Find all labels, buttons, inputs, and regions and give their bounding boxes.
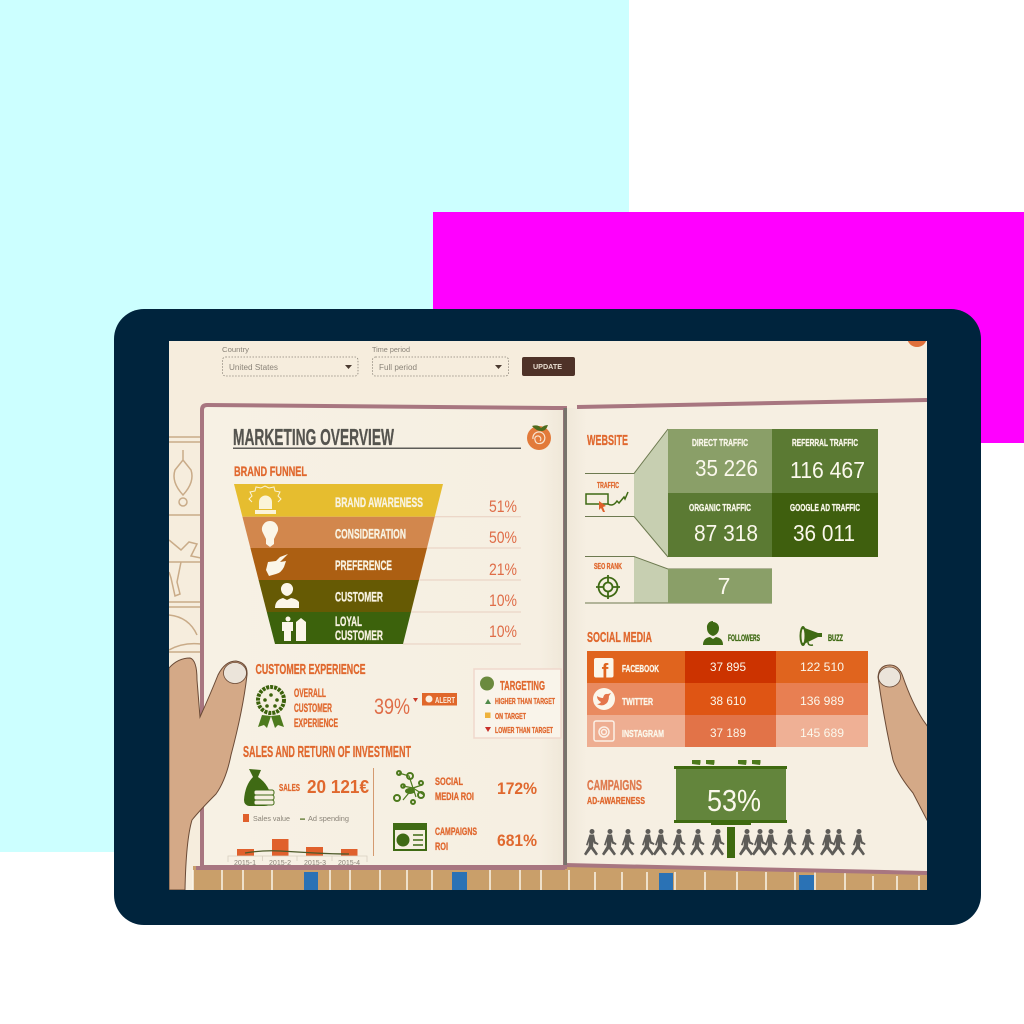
tile: organic traffic [668,493,772,557]
row: instagram [587,715,868,747]
brand funnel [234,463,521,644]
tablet screen [169,327,928,890]
heading: website: WEBSITE [587,432,628,449]
divider [373,768,374,856]
row: instagram: 145 689 [800,728,844,740]
chart legend [243,814,349,823]
row: facebook: f [602,661,609,683]
tile: referral traffic: REFERRAL TRAFFIC [792,437,858,449]
funnel percentages: 21% [489,560,517,579]
sales and return of investment [228,744,537,867]
tile: organic traffic: 87 318 [694,520,758,546]
tile: organic traffic: ORGANIC TRAFFIC [689,502,751,514]
marketing overview title: MARKETING OVERVIEW [233,424,394,450]
right hand holding book [878,665,928,822]
row: instagram: 37 189 [710,728,746,740]
funnel band: preference [250,548,427,580]
update button [522,357,575,376]
label: overall customer experience: CUSTOMER [294,703,332,715]
row: facebook: 122 510 [800,662,844,674]
tile: direct traffic: 35 226 [695,455,758,481]
row: twitter: TWITTER [622,696,653,708]
strip of book page edges [193,866,927,890]
icon: award rosette [258,687,284,728]
bar chart: sales value and ad spending: 2015-4 [338,860,360,867]
seo rank label: SEO RANK [594,562,622,571]
country filter: Country [222,347,250,354]
label: buzz: BUZZ [828,633,843,643]
alert badge: ALERT [435,696,455,705]
metric: sales: 20 121€ [307,777,369,797]
icon: seo target [596,575,620,599]
tile: seo rank value [668,569,772,603]
heading: brand funnel: BRAND FUNNEL [234,463,307,479]
row: twitter [587,683,868,715]
funnel band: loyal customer: CUSTOMER [335,627,383,643]
icon: campaign browser window [394,824,426,850]
label: followers: FOLLOWERS [728,633,760,643]
metric: campaigns roi: ROI [435,841,448,853]
time period filter: Full period [379,363,417,372]
funnel percentages: 50% [489,528,517,547]
left book page [202,405,565,867]
tile: referral traffic [772,429,878,493]
bar chart: sales value and ad spending: 2015-1 [234,860,256,867]
icon: social network [394,771,424,804]
row: facebook: 37 895 [710,662,746,674]
website section [585,429,878,603]
funnel band: customer: CUSTOMER [335,588,383,604]
chart legend: Sales value [253,816,290,823]
funnel band: loyal customer: LOYAL [335,613,362,629]
legend item: lower than target: LOWER THAN TARGET [495,725,553,735]
crowd of walking people [584,829,866,856]
doodle wallpaper [169,437,201,652]
billboard post [727,827,735,858]
funnel percentages: 10% [489,591,517,610]
seo rank connector [585,556,772,603]
metric: social media roi: SOCIAL [435,776,463,788]
metric: campaigns roi: CAMPAIGNS [435,826,477,838]
tile: direct traffic [668,429,772,493]
heading: campaigns ad-awareness: AD-AWARENESS [587,796,645,807]
funnel band: brand awareness [234,484,443,517]
row: facebook: FACEBOOK [622,663,659,675]
tile: seo rank value: 7 [718,573,730,599]
filter bar [222,347,575,376]
icon: traffic trend [586,492,628,512]
chart legend: Ad spending [308,816,349,823]
icon: buzz megaphone [800,626,822,646]
billboard 53 percent [674,760,787,825]
icon: money bag [244,769,274,806]
left hand holding book [169,658,247,890]
metric: sales [279,780,369,793]
book spine [564,408,567,865]
heading: sales and return of investment: SALES AND RETURN OF INVESTMENT [243,744,411,761]
funnel band: brand awareness: BRAND AWARENESS [335,494,423,510]
bar chart: sales value and ad spending: 2015-2 [269,860,291,867]
time period filter [372,347,508,376]
country filter [222,347,358,376]
metric: campaigns roi: 681% [497,831,537,850]
funnel band: consideration [242,517,435,548]
label: overall customer experience: EXPERIENCE [294,718,338,730]
funnel band: loyal customer [267,612,411,644]
metric: campaigns roi [435,826,537,853]
billboard 53 percent: 53% [707,783,761,818]
metric: sales: SALES [279,783,300,794]
tile: google ad traffic: GOOGLE AD TRAFFIC [790,502,860,514]
legend item: on target: ON TARGET [495,711,526,721]
alert badge [422,693,457,706]
icon: orange fruit logo [527,425,551,450]
page border lines [196,400,927,873]
campaigns section [584,760,866,858]
customer experience [256,661,457,730]
funnel percentages [489,497,517,641]
funnel band: preference: PREFERENCE [335,557,392,573]
metric: 39 percent: 39% [374,694,410,719]
social media section [587,621,868,747]
heading: campaigns ad-awareness: CAMPAIGNS [587,777,642,794]
tablet frame [114,309,981,925]
funnel guide lines [403,517,521,644]
row: facebook [587,651,868,683]
label: overall customer experience: OVERALL [294,688,326,700]
icon: down marker [413,698,418,702]
tile: google ad traffic [772,493,878,557]
heading: campaigns ad-awareness [587,777,645,807]
country filter: United States [229,363,278,372]
update button: UPDATE [533,362,562,371]
row: twitter: 136 989 [800,696,844,708]
traffic label: TRAFFIC [597,481,619,490]
bar chart: sales value and ad spending: 2015-3 [304,860,326,867]
tile: referral traffic: 116 467 [790,457,865,483]
traffic connector [585,429,668,557]
funnel percentages: 51% [489,497,517,516]
legend item: higher than target: HIGHER THAN TARGET [495,696,556,706]
funnel percentages: 10% [489,622,517,641]
row: instagram: INSTAGRAM [622,728,664,740]
orange corner badge [908,341,926,347]
metric: social media roi: 172% [497,779,537,798]
label: overall customer experience [294,688,338,730]
right book page [565,400,927,873]
background block: cyan [0,0,629,852]
metric: social media roi [435,776,537,803]
tile: google ad traffic: 36 011 [793,520,855,546]
row: twitter: 38 610 [710,696,746,708]
bar chart: sales value and ad spending [228,839,367,867]
funnel band: consideration: CONSIDERATION [335,526,406,542]
time period filter: Time period [372,347,410,354]
background block: magenta [433,212,1024,443]
icon: target check [480,676,494,690]
heading: customer experience: CUSTOMER EXPERIENCE [256,661,366,678]
targeting legend [474,669,561,738]
icon: followers person [703,621,723,645]
funnel band: customer [259,580,419,612]
metric: social media roi: MEDIA ROI [435,791,474,803]
heading: targeting: TARGETING [500,679,545,693]
tile: direct traffic: DIRECT TRAFFIC [692,437,748,449]
heading: social media: SOCIAL MEDIA [587,629,652,646]
